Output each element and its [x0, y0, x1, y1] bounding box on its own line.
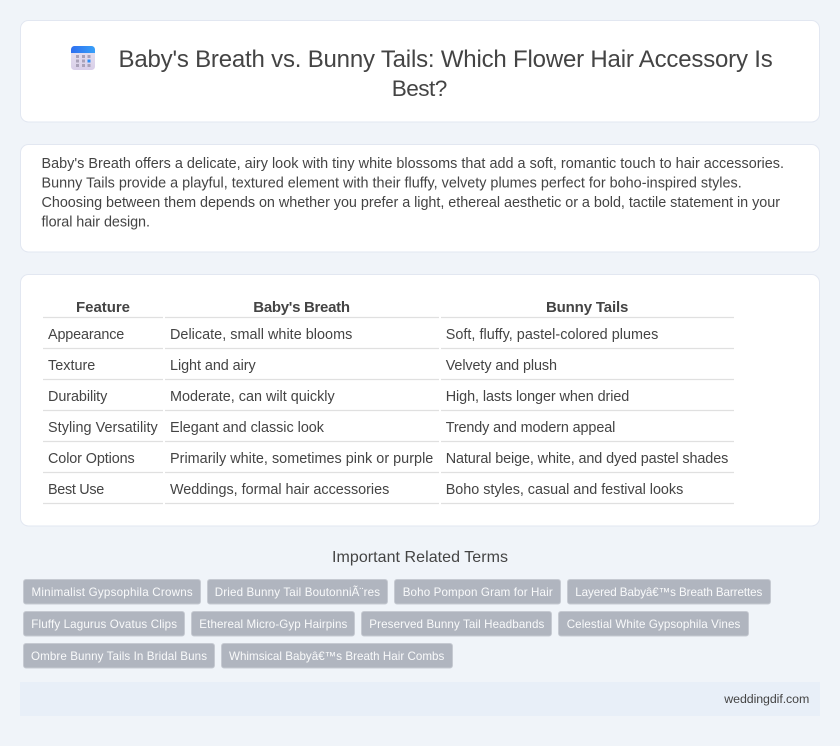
tag	[24, 644, 214, 668]
footer	[20, 682, 820, 716]
tag	[222, 644, 452, 668]
title: Baby's Breath vs. Bunny Tails: Which Flower Hair Accessory Is	[118, 46, 773, 73]
tag: Minimalist Gypsophila Crowns	[32, 586, 193, 599]
table row: styling versatility: Styling Versatility	[48, 420, 158, 436]
text block: introduction paragraph: Bunny Tails provide a playful, textured element with their fluffy, velvety plumes perfect for boho-inspired styles.	[42, 176, 742, 192]
tag: Layered Babyâ€™s Breath Barrettes	[575, 586, 763, 599]
footer: weddingdif.com	[723, 692, 809, 706]
table row: texture	[43, 358, 734, 380]
table row: appearance: Delicate, small white blooms	[170, 327, 352, 343]
text block: introduction paragraph: Choosing between them depends on whether you prefer a light, ethereal aesthetic or a bold, tactile statement in your	[42, 195, 780, 211]
tag: Ethereal Micro-Gyp Hairpins	[199, 618, 348, 631]
text block: introduction paragraph	[42, 156, 784, 230]
tag	[394, 580, 560, 604]
tag	[24, 612, 184, 636]
table row: styling versatility	[43, 420, 734, 442]
table row: durability: Moderate, can wilt quickly	[170, 389, 335, 405]
table row: best use: Best Use	[48, 482, 104, 498]
text block: introduction paragraph: floral hair design.	[42, 214, 150, 230]
tag	[192, 612, 354, 636]
tag	[362, 612, 552, 636]
table row: durability: High, lasts longer when dried	[446, 389, 629, 405]
table row: color options: Natural beige, white, and dyed pastel shades	[446, 451, 728, 467]
icon: calendar	[71, 46, 95, 70]
table row: appearance	[43, 327, 734, 348]
table row: durability: Durability	[48, 389, 108, 405]
tag: Preserved Bunny Tail Headbands	[369, 618, 545, 631]
tag: Fluffy Lagurus Ovatus Clips	[31, 618, 177, 631]
text block: introduction paragraph: Baby's Breath offers a delicate, airy look with tiny white blossoms that add a soft, romantic touch to hair accessories.	[42, 156, 784, 172]
table row: best use: Weddings, formal hair accessories	[170, 482, 389, 498]
table header: Feature	[76, 299, 130, 316]
table row: appearance: Appearance	[48, 327, 124, 343]
table row: texture: Light and airy	[170, 358, 256, 374]
table row: color options	[43, 451, 734, 472]
table row: styling versatility: Trendy and modern appeal	[446, 420, 615, 436]
tag: Ombre Bunny Tails In Bridal Buns	[31, 650, 207, 663]
tag	[558, 612, 748, 636]
tag: Whimsical Babyâ€™s Breath Hair Combs	[229, 650, 445, 663]
table header: Baby's Breath	[253, 299, 350, 316]
panel: comparison table	[20, 274, 820, 526]
title	[118, 46, 773, 101]
tag: Celestial White Gypsophila Vines	[567, 618, 741, 631]
tag: Dried Bunny Tail BoutonniÃ¨res	[215, 586, 380, 599]
tag list: related terms	[24, 580, 770, 668]
table row: color options: Primarily white, sometimes pink or purple	[170, 451, 433, 467]
panel: introduction	[20, 144, 820, 252]
title: Best?	[392, 76, 447, 101]
tag	[24, 580, 200, 604]
tag	[568, 580, 770, 604]
tag: Boho Pompon Gram for Hair	[403, 586, 553, 599]
panel: header	[20, 20, 820, 122]
table row: styling versatility: Elegant and classic look	[170, 420, 325, 436]
table row: best use	[43, 482, 734, 504]
table row: texture: Velvety and plush	[446, 358, 557, 374]
table row: appearance: Soft, fluffy, pastel-colored plumes	[446, 327, 658, 343]
table row: durability	[43, 389, 734, 410]
table header	[43, 299, 734, 318]
heading: important related terms: Important Related Terms	[332, 549, 508, 566]
tag	[208, 580, 388, 604]
table row: best use: Boho styles, casual and festival looks	[446, 482, 683, 498]
table row: texture: Texture	[48, 358, 95, 374]
table header: Bunny Tails	[546, 299, 628, 316]
table row: color options: Color Options	[48, 451, 135, 467]
